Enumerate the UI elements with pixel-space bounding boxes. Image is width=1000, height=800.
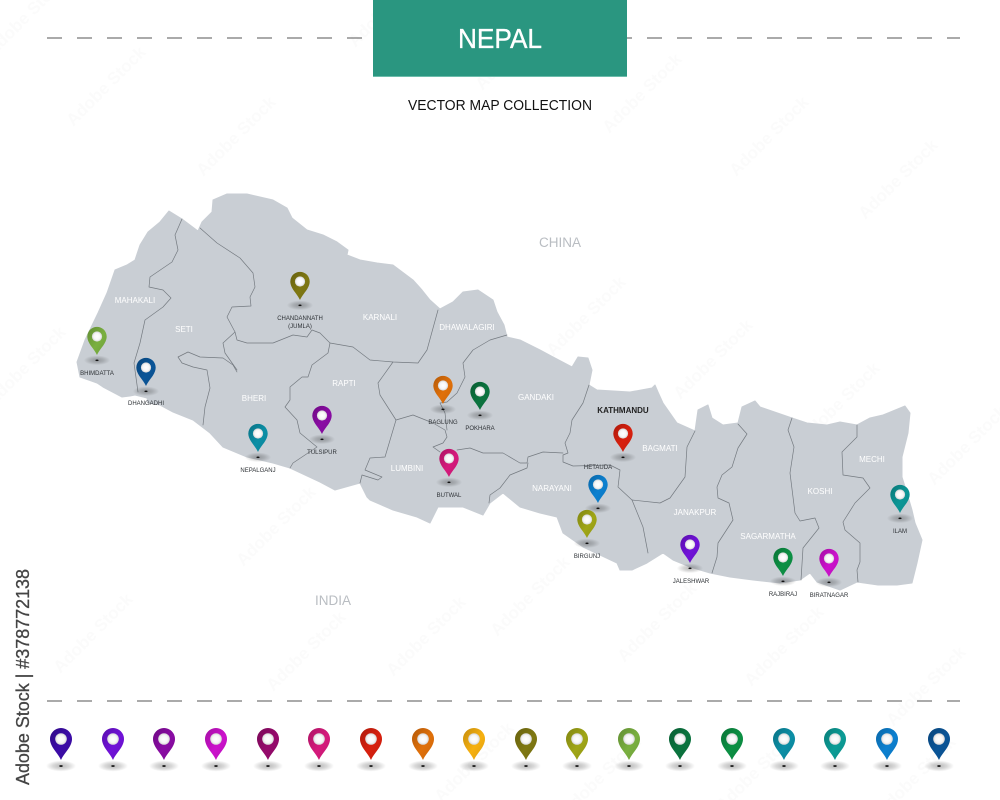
legend pin: navy <box>924 728 954 772</box>
background watermark: Adobe Stock <box>855 135 942 223</box>
background watermark: Adobe Stock <box>614 578 701 666</box>
region labels: MECHI <box>859 455 885 464</box>
legend pin: blue <box>872 728 902 772</box>
background watermark: Adobe Stock <box>487 552 574 640</box>
pin: Nepalganj <box>240 424 276 474</box>
region labels: BHERI <box>242 394 266 403</box>
region labels: LUMBINI <box>391 464 423 473</box>
pin: Dhangadhi: DHANGADHI <box>128 401 164 407</box>
legend pin: pink <box>304 728 334 772</box>
pin: Ilam: ILAM <box>893 529 907 535</box>
region labels <box>115 296 885 541</box>
region labels: MAHAKALI <box>115 296 155 305</box>
title banner: NEPAL <box>458 23 542 54</box>
region labels: SETI <box>175 325 193 334</box>
pin: Chandannath <box>277 272 323 330</box>
pin: Ilam <box>887 485 913 535</box>
pin: Birgunj: BIRGUNJ <box>574 554 600 560</box>
pin: Dhangadhi <box>128 358 164 407</box>
pin: Chandannath: (JUMLA) <box>288 324 312 330</box>
region labels: GANDAKI <box>518 393 554 402</box>
pin: Kathmandu: KATHMANDU <box>597 406 649 415</box>
background watermark: Adobe Stock <box>797 358 884 446</box>
pin: Tulsipur <box>307 406 338 456</box>
pin: Kathmandu <box>597 406 649 462</box>
pin: Rajbiraj <box>769 548 797 598</box>
stock credit, vertical: Adobe Stock | #378772138 <box>13 569 33 785</box>
pin: Birgunj <box>574 510 600 560</box>
district borders <box>134 219 870 582</box>
legend pin: olive <box>511 728 541 772</box>
pin: Biratnagar: BIRATNAGAR <box>810 593 849 599</box>
background watermark: Adobe Stock <box>543 272 630 360</box>
legend pin: yellow green <box>562 728 592 772</box>
background watermark: Adobe Stock <box>741 602 828 690</box>
pin: Biratnagar <box>810 549 849 599</box>
background watermark: Adobe Stock <box>472 6 559 94</box>
pin colour legend row <box>46 728 954 772</box>
legend pin: orange <box>408 728 438 772</box>
pin: Bhimdatta: BHIMDATTA <box>80 371 114 377</box>
map of Nepal <box>77 194 922 590</box>
region labels: KOSHI <box>808 487 832 496</box>
legend pin: purple <box>149 728 179 772</box>
pin: Hetauda: HETAUDA <box>584 465 612 471</box>
legend pin: indigo <box>46 728 76 772</box>
bottom dashed line <box>47 700 960 702</box>
background watermark: Adobe Stock <box>383 592 470 680</box>
background watermark: Adobe Stock <box>63 42 150 130</box>
pin: Chandannath: CHANDANNATH <box>277 316 323 322</box>
legend pin: green <box>717 728 747 772</box>
title banner <box>373 0 627 77</box>
legend pin: cerulean <box>769 728 799 772</box>
background watermark: Adobe Stock <box>50 589 137 677</box>
pin: Jaleshwar: JALESHWAR <box>673 579 710 585</box>
region labels: JANAKPUR <box>674 508 717 517</box>
region labels: NARAYANI <box>532 484 572 493</box>
pin: Butwal <box>436 449 462 499</box>
legend pin: red <box>356 728 386 772</box>
region labels: RAPTI <box>332 379 356 388</box>
pin: Tulsipur: TULSIPUR <box>307 450 338 456</box>
pin: Bhimdatta <box>80 327 114 377</box>
top dashed line <box>47 37 960 39</box>
background watermark: Adobe Stock <box>233 482 320 570</box>
background watermark: Adobe Stock <box>599 49 686 137</box>
legend pin: violet <box>98 728 128 772</box>
pin: Rajbiraj: RAJBIRAJ <box>769 592 797 598</box>
legend pin: magenta <box>201 728 231 772</box>
region labels: KARNALI <box>363 313 397 322</box>
pin: Pokhara: POKHARA <box>465 426 495 432</box>
legend pin: amber <box>459 728 489 772</box>
pin: Butwal: BUTWAL <box>437 493 462 499</box>
pin: Baglung: BAGLUNG <box>428 420 458 426</box>
background watermark: Adobe Stock <box>193 92 280 180</box>
region labels: BAGMATI <box>642 444 678 453</box>
neighbour label: India: INDIA <box>315 593 351 608</box>
pin: Nepalganj: NEPALGANJ <box>240 468 276 474</box>
background watermark: Adobe Stock <box>726 92 813 180</box>
pin: Jaleshwar <box>673 535 710 585</box>
pin: Hetauda <box>584 465 612 513</box>
pin: Baglung <box>428 376 458 426</box>
region labels: SAGARMATHA <box>740 532 796 541</box>
background watermark: Adobe Stock <box>670 315 757 403</box>
subtitle: VECTOR MAP COLLECTION <box>408 97 592 114</box>
region labels: DHAWALAGIRI <box>439 323 495 332</box>
pin: Pokhara <box>465 382 495 432</box>
legend pin: light green <box>614 728 644 772</box>
legend pin: teal <box>820 728 850 772</box>
background watermark: Adobe Stock <box>263 607 350 695</box>
background watermark: Adobe Stock <box>883 642 970 730</box>
country shape <box>77 194 922 590</box>
legend pin: plum <box>253 728 283 772</box>
legend pin: dark green <box>665 728 695 772</box>
neighbour label: China: CHINA <box>539 235 581 250</box>
